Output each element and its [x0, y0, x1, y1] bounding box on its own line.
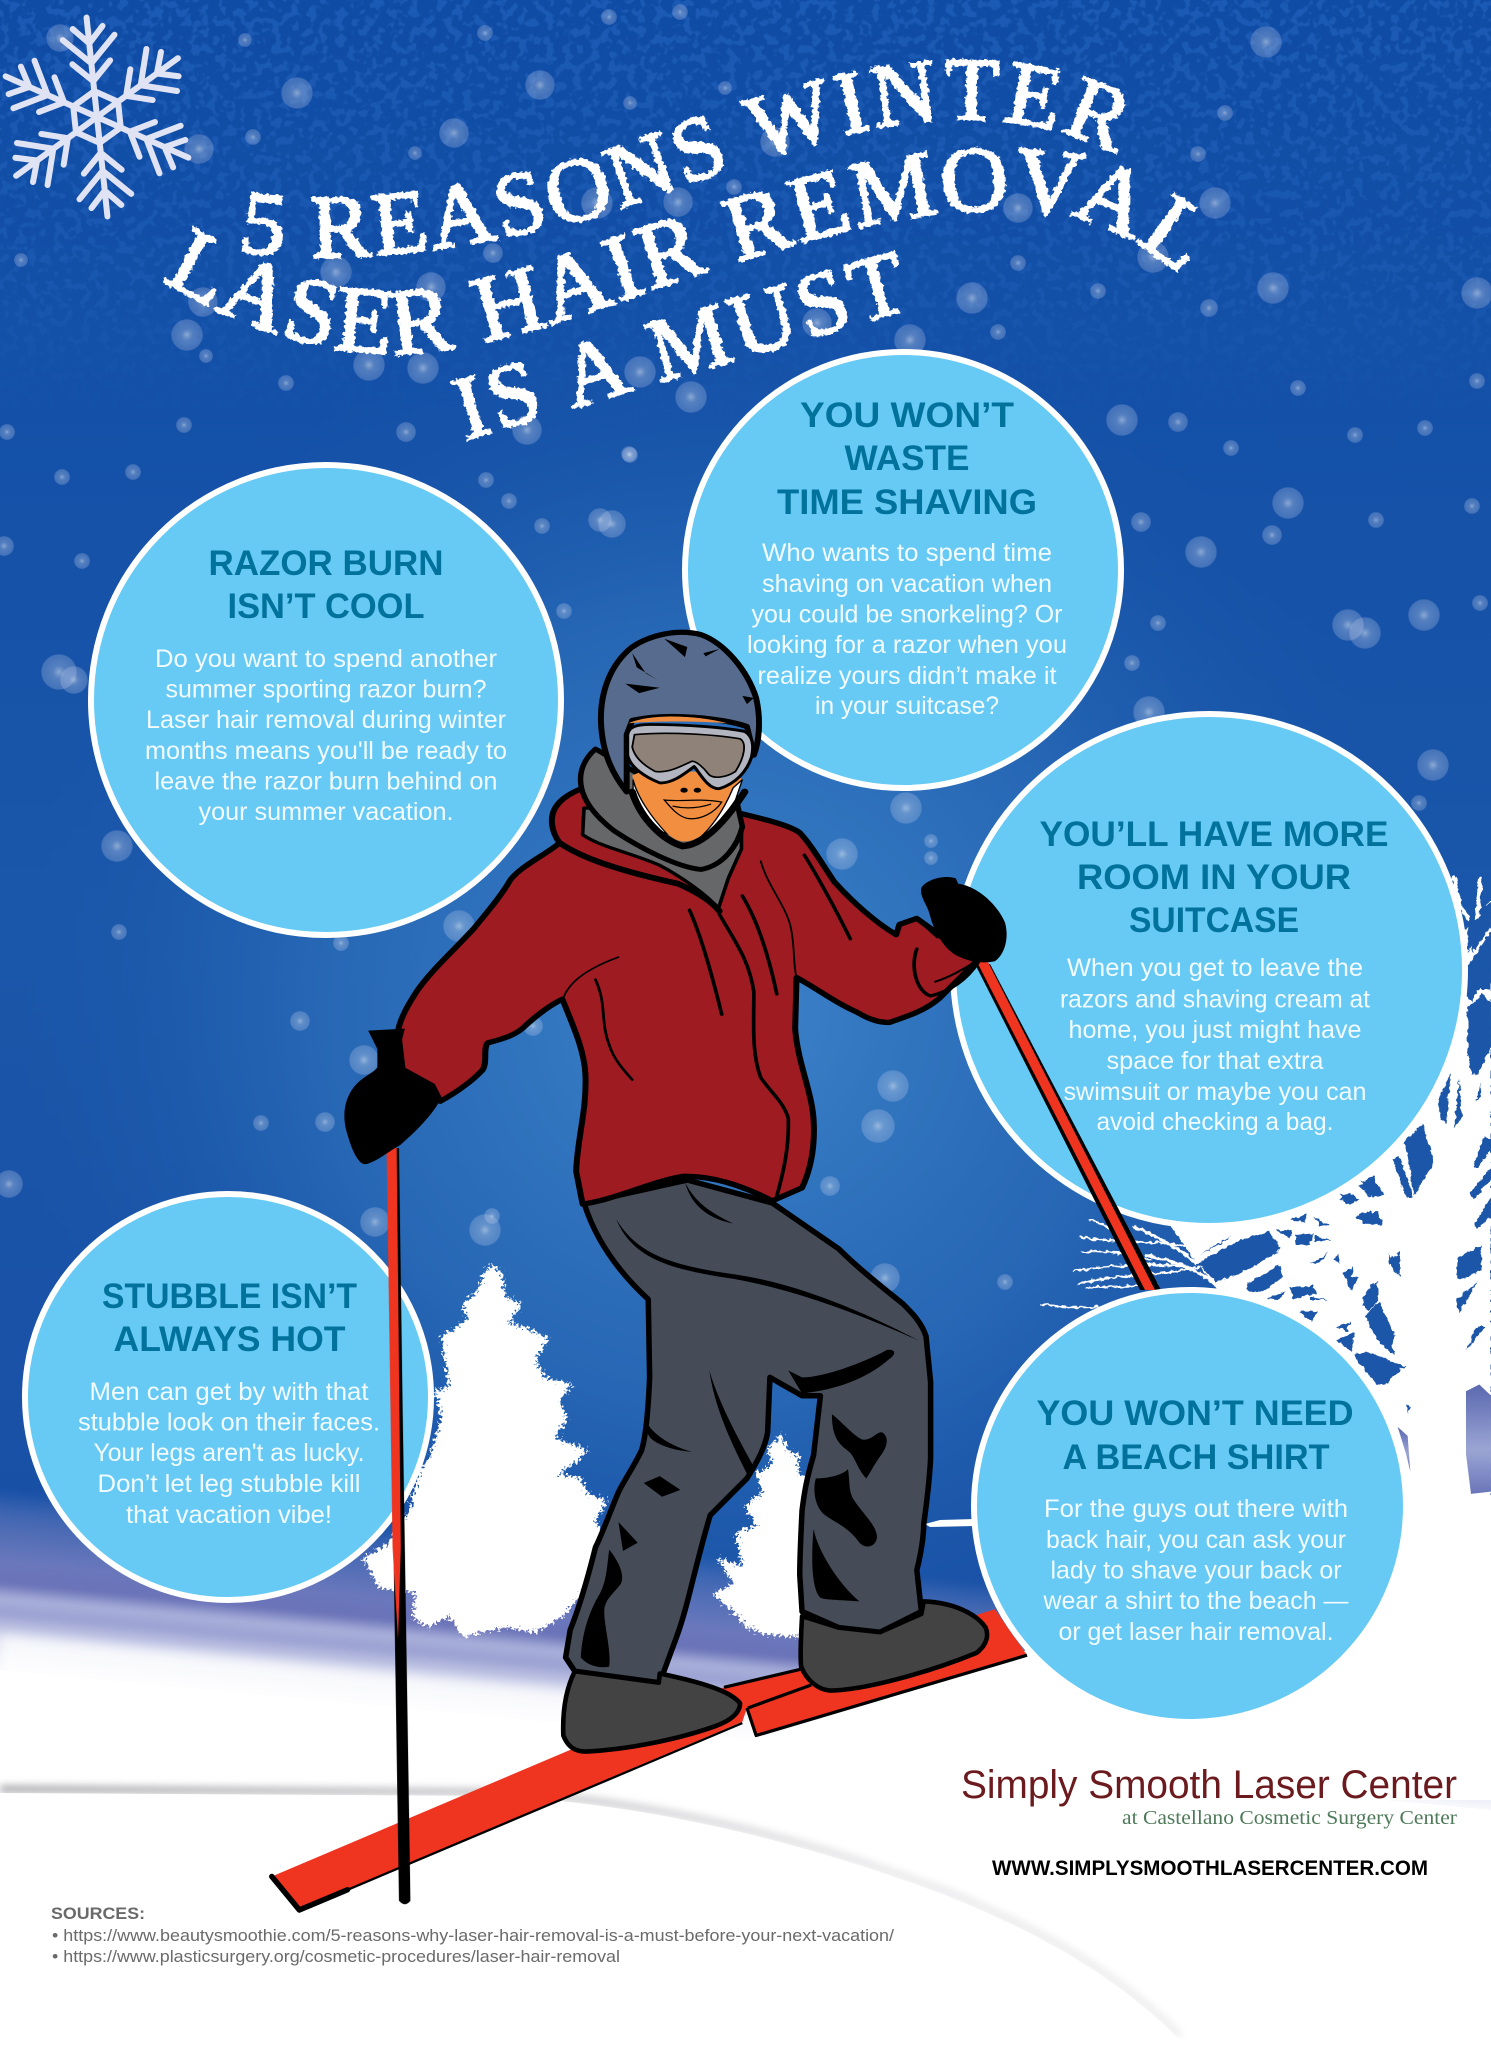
- body text: beach shirt: wear a shirt to the beach —: [1043, 1587, 1348, 1615]
- body text: suitcase: home, you just might have: [1068, 1016, 1362, 1044]
- logo: Simply Smooth Laser Center: at Castellano Cosmetic Surgery Center: [1122, 1807, 1457, 1829]
- body text: stubble: that vacation vibe!: [126, 1501, 332, 1529]
- body text: beach shirt: back hair, you can ask your: [1046, 1526, 1346, 1554]
- tree: large white pine: [364, 1265, 607, 1637]
- heading: beach shirt: YOU WON’T NEED: [1036, 1394, 1354, 1433]
- heading: suitcase: ROOM IN YOUR: [1077, 858, 1351, 897]
- skier: jacket: [398, 789, 979, 1204]
- body text: razor burn: months means you'll be ready to: [145, 737, 507, 765]
- heading: stubble: [102, 1277, 357, 1359]
- tree: small white pine: [713, 1435, 820, 1639]
- body text: razor burn: your summer vacation.: [198, 798, 454, 826]
- heading: razor burn: ISN’T COOL: [228, 587, 424, 626]
- body text: stubble: Men can get by with that: [90, 1378, 369, 1406]
- bare white tree at right: [1042, 878, 1491, 1560]
- sources: • https://www.beautysmoothie.com/5-reasons-why-laser-hair-removal-is-a-must-before-your-next-vacation/: [52, 1926, 894, 1945]
- skier: hood and scarf: [560, 749, 742, 911]
- heading: razor burn: [208, 544, 444, 626]
- heading: stubble: STUBBLE ISN’T: [102, 1277, 357, 1316]
- body text: razor burn: leave the razor burn behind on: [154, 767, 498, 795]
- heading: suitcase: SUITCASE: [1129, 901, 1299, 940]
- heading: time shaving: WASTE: [844, 439, 970, 478]
- icon: snowflake: [0, 7, 207, 227]
- body text: suitcase: When you get to leave the: [1067, 954, 1363, 982]
- body text: time shaving: looking for a razor when you: [747, 631, 1067, 659]
- sources: SOURCES:: [51, 1904, 145, 1923]
- website url: WWW.SIMPLYSMOOTHLASERCENTER.COM: [992, 1857, 1428, 1880]
- skier: pants: [566, 1180, 931, 1683]
- body text: time shaving: realize yours didn’t make it: [758, 662, 1057, 690]
- body text: time shaving: Who wants to spend time: [762, 539, 1052, 567]
- panel: beach shirt: [974, 1290, 1406, 1722]
- heading: stubble: ALWAYS HOT: [114, 1320, 346, 1359]
- body text: suitcase: razors and shaving cream at: [1060, 986, 1370, 1014]
- heading: time shaving: YOU WON’T: [800, 396, 1014, 435]
- body text: stubble: [78, 1378, 380, 1529]
- skis: [272, 1609, 1027, 1910]
- foreground hill: [0, 1789, 1180, 2048]
- skier: gloves: [344, 877, 1007, 1164]
- skier: face: [632, 771, 745, 846]
- body text: time shaving: shaving on vacation when: [762, 570, 1052, 598]
- body text: suitcase: [1060, 954, 1370, 1136]
- title: 5 Reasons Winter Laser Hair Removal Is a Must: [163, 58, 1198, 442]
- body text: beach shirt: For the guys out there with: [1044, 1495, 1348, 1523]
- body text: stubble: Don’t let leg stubble kill: [98, 1470, 360, 1498]
- body text: razor burn: Do you want to spend another: [155, 645, 497, 673]
- body text: suitcase: swimsuit or maybe you can: [1064, 1078, 1366, 1106]
- body text: beach shirt: [1043, 1495, 1348, 1646]
- body text: stubble: stubble look on their faces.: [78, 1408, 380, 1436]
- body text: beach shirt: lady to shave your back or: [1050, 1556, 1342, 1584]
- panel: time shaving: [685, 352, 1121, 788]
- heading: beach shirt: A BEACH SHIRT: [1062, 1438, 1330, 1477]
- body text: razor burn: [145, 645, 507, 826]
- falling snow bubbles: [0, 4, 1491, 1293]
- body text: time shaving: you could be snorkeling? Or: [752, 600, 1062, 628]
- skier: helmet: [601, 632, 759, 792]
- sources: [51, 1904, 894, 1966]
- body text: beach shirt: or get laser hair removal.: [1058, 1618, 1334, 1646]
- panel: stubble: [25, 1194, 431, 1600]
- right ski pole: [975, 962, 1161, 1290]
- heading: razor burn: RAZOR BURN: [208, 544, 444, 583]
- body text: razor burn: summer sporting razor burn?: [166, 676, 486, 704]
- skier: goggles: [628, 725, 753, 789]
- logo: Simply Smooth Laser Center: [961, 1763, 1457, 1829]
- body text: suitcase: space for that extra: [1106, 1047, 1324, 1075]
- logo: Simply Smooth Laser Center: Simply Smooth Laser Center: [961, 1763, 1457, 1807]
- title: 5 Reasons Winter Laser Hair Removal Is a Must: IS A MUST: [450, 250, 902, 442]
- heading: suitcase: YOU’LL HAVE MORE: [1040, 815, 1388, 854]
- heading: time shaving: [777, 396, 1037, 522]
- heading: time shaving: TIME SHAVING: [777, 483, 1037, 522]
- body text: time shaving: in your suitcase?: [815, 692, 999, 720]
- skier: [344, 632, 1007, 1752]
- body text: stubble: Your legs aren't as lucky.: [94, 1439, 364, 1467]
- heading: suitcase: [1040, 815, 1388, 940]
- skier: boots: [563, 1601, 987, 1752]
- snow bank bands: [0, 1484, 1491, 2048]
- body text: suitcase: avoid checking a bag.: [1096, 1108, 1334, 1136]
- body text: razor burn: Laser hair removal during winter: [146, 706, 506, 734]
- heading: beach shirt: [1036, 1394, 1354, 1477]
- left ski pole: [387, 1148, 410, 1904]
- title: 5 Reasons Winter Laser Hair Removal Is a Must: 5 REASONS WINTER: [241, 58, 1126, 260]
- panel: suitcase: [953, 714, 1465, 1226]
- title: 5 Reasons Winter Laser Hair Removal Is a Must: LASER HAIR REMOVAL: [163, 146, 1198, 358]
- panel: razor burn: [91, 465, 561, 935]
- sources: • https://www.plasticsurgery.org/cosmetic-procedures/laser-hair-removal: [52, 1947, 620, 1966]
- body text: time shaving: [747, 539, 1067, 720]
